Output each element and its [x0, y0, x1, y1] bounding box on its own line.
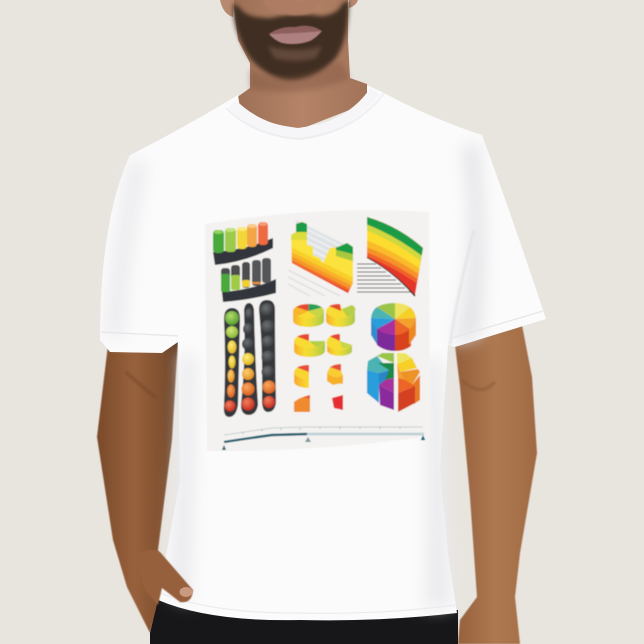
left thumb over shirt hem — [134, 550, 193, 605]
pie chart: quarter slice — [327, 364, 343, 385]
neck shadow — [250, 60, 350, 92]
traffic light column 2 — [241, 303, 258, 415]
large pie chart — [371, 303, 416, 351]
product photo scene — [96, 0, 546, 644]
pie chart: small full — [293, 304, 324, 327]
t-shirt — [100, 85, 546, 620]
bar chart: upper cylinders on tray — [213, 222, 273, 265]
lips — [269, 26, 322, 44]
printed graphic panel — [205, 210, 430, 451]
pants — [150, 600, 458, 644]
timeline ruler — [222, 427, 425, 450]
pie chart: third slice — [294, 365, 309, 388]
pie chart: two-thirds A — [294, 334, 325, 357]
pie chart: small missing slice — [326, 304, 355, 327]
area chart: stepped profile — [288, 220, 354, 296]
pie chart: orange slice — [294, 395, 310, 412]
traffic light column 3 — [259, 300, 276, 412]
bar chart: lower cylinders on tray — [221, 258, 276, 302]
timeline markers — [222, 445, 226, 450]
beard — [233, 0, 349, 80]
traffic light column 1 — [224, 308, 240, 417]
nose shadow — [262, 0, 322, 15]
right arm and hand — [455, 325, 537, 644]
pie chart: red slice — [332, 395, 343, 410]
left arm and hand — [97, 340, 178, 633]
beard lighter stubble patches — [268, 46, 322, 61]
pie chart: half A — [326, 334, 352, 356]
shirt shading — [104, 158, 148, 338]
large exploded pie chart — [367, 353, 420, 412]
sleeve hems — [101, 332, 178, 336]
collar — [232, 91, 375, 134]
model: neck and face — [220, 0, 370, 132]
area chart: curved layered surface — [356, 216, 424, 297]
ears — [220, 0, 358, 17]
